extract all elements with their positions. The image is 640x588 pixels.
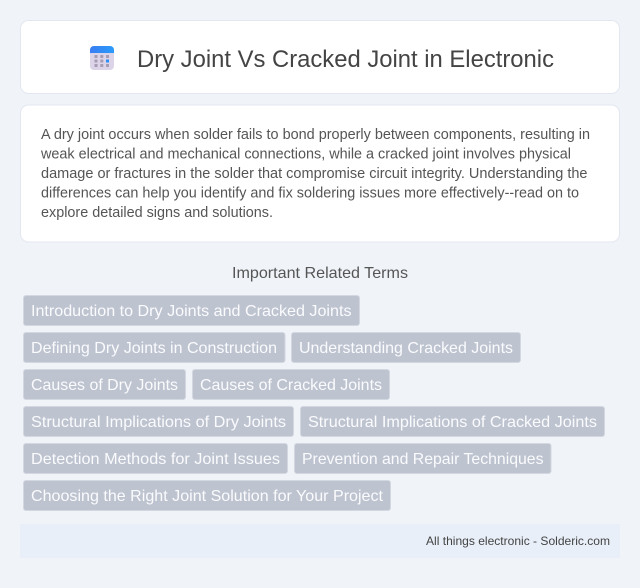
tag: structural implications of dry joints xyxy=(24,406,294,436)
tag: defining dry joints: Defining Dry Joints in Construction xyxy=(31,340,277,357)
panel: header xyxy=(20,20,620,94)
tag: structural implications of cracked joints xyxy=(300,406,604,436)
tag: detection methods xyxy=(24,444,288,474)
footer xyxy=(20,524,620,558)
panel: description xyxy=(20,105,620,242)
tag: causes of cracked joints xyxy=(192,370,390,400)
panel: related term tags xyxy=(24,296,604,510)
text block: description: A dry joint occurs when solder fails to bond properly between components, resulting in xyxy=(41,127,590,143)
text block: description xyxy=(40,127,590,221)
icon: calendar xyxy=(90,46,114,70)
tag: detection methods: Detection Methods for Joint Issues xyxy=(31,451,280,468)
title: Dry Joint Vs Cracked Joint in Electronic xyxy=(137,46,554,73)
tag: causes of cracked joints: Causes of Cracked Joints xyxy=(200,377,382,394)
tag: introduction xyxy=(24,296,360,326)
text block: description: explore detailed signs and solutions. xyxy=(41,205,273,221)
tag: causes of dry joints xyxy=(24,370,186,400)
tag: introduction: Introduction to Dry Joints and Cracked Joints xyxy=(31,303,352,320)
tag: structural implications of cracked joints: Structural Implications of Cracked Joints xyxy=(308,414,597,431)
footer: All things electronic - Solderic.com xyxy=(426,534,610,548)
heading: important related terms: Important Related Terms xyxy=(232,265,408,282)
text block: description: differences can help you identify and fix soldering issues more effectively--read on to xyxy=(41,186,579,202)
text block: description: weak electrical and mechanical connections, while a cracked joint involves physical xyxy=(40,146,571,162)
tag: causes of dry joints: Causes of Dry Joints xyxy=(31,377,178,394)
tag: defining dry joints xyxy=(24,332,285,362)
tag: prevention and repair xyxy=(294,444,551,474)
tag: prevention and repair: Prevention and Repair Techniques xyxy=(302,451,544,468)
tag: structural implications of dry joints: Structural Implications of Dry Joints xyxy=(31,414,286,431)
tag: understanding cracked joints: Understanding Cracked Joints xyxy=(299,340,513,357)
tag: choosing the right joint: Choosing the Right Joint Solution for Your Project xyxy=(31,488,384,505)
text block: description: damage or fractures in the solder that compromise circuit integrity. Understanding the xyxy=(41,166,588,182)
tag: understanding cracked joints xyxy=(292,332,520,362)
tag: choosing the right joint xyxy=(24,480,390,510)
